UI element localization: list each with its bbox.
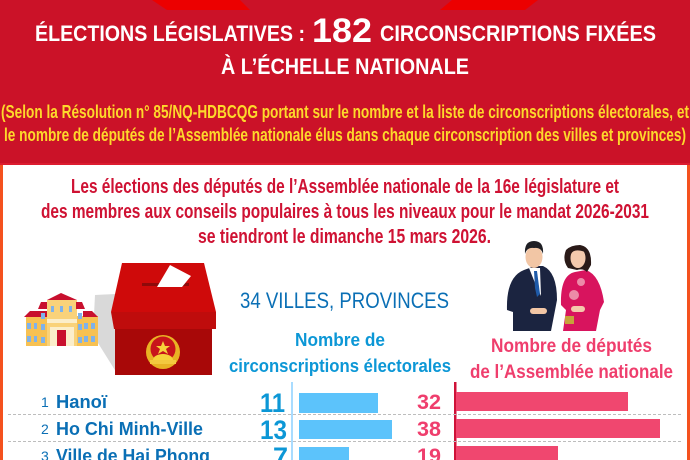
icon: ballot box	[111, 263, 216, 375]
title	[35, 12, 656, 79]
title: 182	[312, 12, 372, 50]
header band	[0, 0, 690, 165]
row 1: Hanoï: 1	[41, 394, 49, 410]
subtitle	[1, 101, 689, 145]
axis: députés	[454, 382, 456, 460]
axis: circonscriptions	[291, 382, 293, 460]
row 1: Hanoï: 32	[417, 391, 441, 414]
heading: 34 villes, provinces: 34 VILLES, PROVINCES	[240, 288, 449, 313]
title: CIRCONSCRIPTIONS FIXÉES	[380, 21, 656, 46]
ballot box shadow	[93, 294, 120, 375]
intro text: se tiendront le dimanche 15 mars 2026.	[198, 225, 491, 248]
heading: circonscriptions column: circonscriptions électorales	[229, 356, 451, 376]
row 2: Ho Chi Minh-Ville: 2	[41, 421, 49, 437]
icon: building	[24, 293, 98, 346]
heading: circonscriptions column: Nombre de	[295, 330, 385, 350]
row 3: Ville de Hai Phong	[41, 442, 558, 460]
title: ÉLECTIONS LÉGISLATIVES :	[35, 21, 305, 46]
row 1: Hanoï	[41, 388, 628, 418]
row 1: Hanoï: 11	[260, 388, 285, 418]
right border	[687, 165, 690, 460]
icon: two deputies	[507, 241, 604, 331]
intro text	[41, 175, 649, 248]
heading: députés column: Nombre de députés	[491, 336, 652, 357]
row 2: Ho Chi Minh-Ville	[41, 415, 660, 445]
row 2: Ho Chi Minh-Ville: Ho Chi Minh-Ville	[56, 418, 203, 439]
heading: députés column	[470, 336, 673, 383]
row 2: Ho Chi Minh-Ville: 13	[260, 415, 287, 445]
row 2: Ho Chi Minh-Ville: 38	[417, 418, 441, 441]
title: À L’ÉCHELLE NATIONALE	[221, 54, 469, 79]
heading: circonscriptions column	[229, 330, 451, 376]
left border	[0, 165, 3, 460]
row 1: Hanoï: Hanoï	[56, 391, 108, 412]
